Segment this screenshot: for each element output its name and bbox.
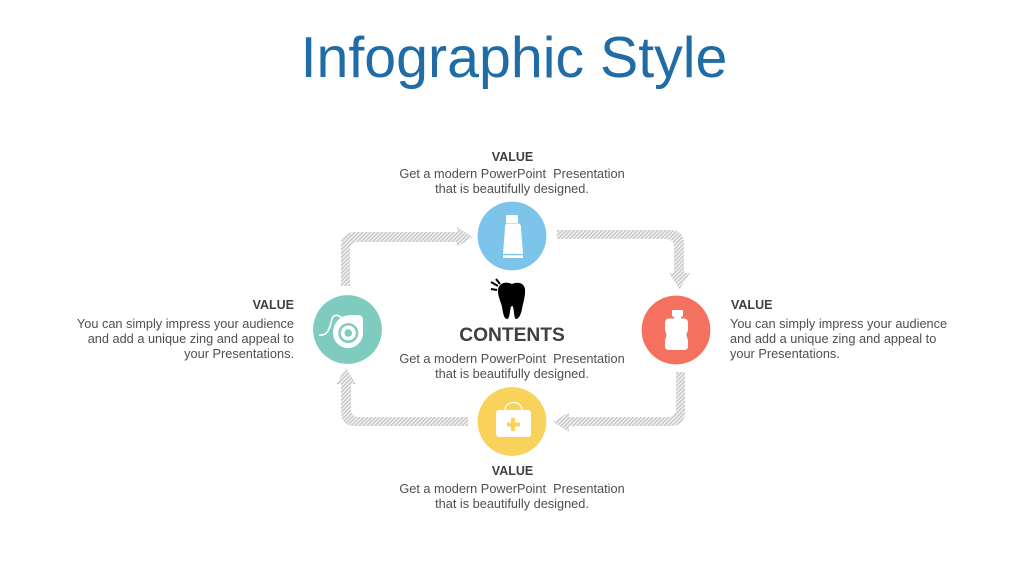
text block: bottom value: that is beautifully designed. <box>435 496 589 511</box>
icon: tube bottle <box>503 215 523 258</box>
text block: right value: and add a unique zing and appeal to <box>730 331 936 346</box>
text block: right value: your Presentations. <box>730 346 840 361</box>
arrow: top to right <box>557 230 690 289</box>
icon: medical kit <box>496 402 531 437</box>
title: Infographic Style <box>301 26 727 90</box>
text block: bottom value: Get a modern PowerPoint Presentation <box>399 481 625 496</box>
text block: right value: VALUE <box>731 298 772 312</box>
text block: contents description: Get a modern PowerPoint Presentation <box>399 351 625 366</box>
icon: dental floss <box>319 315 363 348</box>
arrow: right to bottom <box>553 372 685 432</box>
icon: mouthwash bottle <box>665 310 688 350</box>
text block: right value: You can simply impress your audience <box>730 316 947 331</box>
node: bottom yellow medical kit <box>478 387 546 456</box>
heading: contents: CONTENTS <box>459 325 565 346</box>
text block: top value: Get a modern PowerPoint Presentation <box>399 166 625 181</box>
text block: left value: and add a unique zing and appeal to <box>88 331 294 346</box>
text block: top value: VALUE <box>492 150 533 164</box>
text block: top value: that is beautifully designed. <box>435 181 589 196</box>
icon: tooth <box>491 279 525 319</box>
text block: left value: VALUE <box>253 298 294 312</box>
node: left teal floss <box>313 295 382 364</box>
text block: bottom value: VALUE <box>492 464 533 478</box>
text block: contents description: that is beautifully designed. <box>435 366 589 381</box>
text block: left value: You can simply impress your audience <box>77 316 294 331</box>
node: top blue bottle <box>478 202 546 270</box>
node: right red mouthwash <box>642 296 710 364</box>
text block: left value: your Presentations. <box>184 346 294 361</box>
arrow: bottom to left <box>336 368 468 426</box>
arrow: left to top <box>341 227 473 286</box>
